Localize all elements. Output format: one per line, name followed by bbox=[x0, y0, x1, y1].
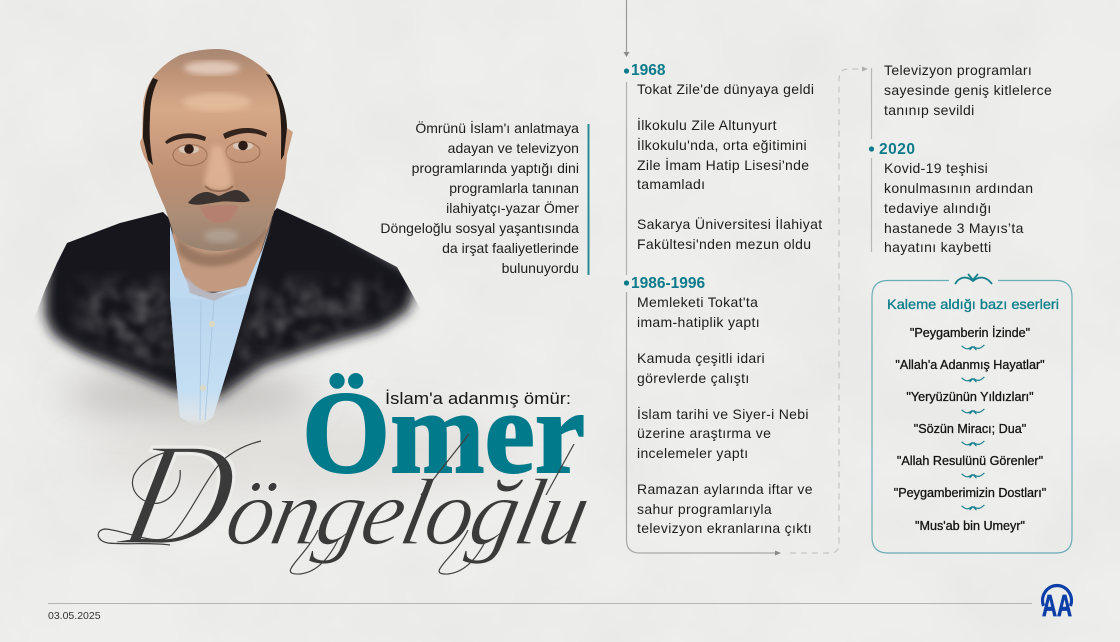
portrait: shirt bbox=[170, 220, 272, 428]
portrait: nose bbox=[205, 146, 232, 190]
icons: list ornaments bbox=[962, 345, 984, 510]
title: surname: öngeloğlu bbox=[218, 459, 597, 565]
television events: sayesinde geniş kitlelerce bbox=[884, 82, 1052, 98]
icon: ornament top bbox=[955, 274, 992, 284]
title block bbox=[98, 367, 607, 577]
1968 events: Tokat Zile'de dünyaya geldi bbox=[637, 81, 814, 97]
1968 events: İlkokulu Zile Altunyurt bbox=[637, 116, 777, 133]
1986-1996 events: İslam tarihi ve Siyer-i Nebi bbox=[637, 405, 809, 422]
intro paragraph: da irşat faaliyetlerinde bbox=[442, 240, 579, 256]
2020 events: hastanede 3 Mayıs’ta bbox=[884, 220, 1024, 236]
works list: "Peygamberin İzinde" bbox=[910, 326, 1030, 340]
intro accent line bbox=[588, 124, 590, 275]
2020 events bbox=[884, 160, 1033, 255]
1968 events: Zile İmam Hatip Lisesi'nde bbox=[637, 156, 809, 173]
1986-1996 events: sahur programlarıyla bbox=[637, 501, 772, 517]
portrait: undershirt bbox=[186, 276, 246, 301]
portrait: mouth bbox=[200, 205, 238, 223]
1986-1996 events: Memleketi Tokat'ta bbox=[637, 294, 758, 310]
works list bbox=[894, 326, 1046, 533]
title: surname flourishes bbox=[98, 434, 574, 574]
portrait photo illustration bbox=[40, 49, 420, 428]
portrait: forehead highlight bbox=[183, 93, 251, 111]
portrait: eye bags bbox=[173, 144, 207, 166]
portrait: jacket bbox=[40, 190, 420, 400]
portrait: mist below jacket bbox=[65, 371, 315, 419]
portrait: neck bbox=[172, 205, 272, 292]
1986-1996 events: imam-hatiplik yaptı bbox=[637, 314, 760, 330]
portrait: shirt buttons bbox=[200, 321, 215, 391]
1968 events: İlkokulu'nda, orta eğitimini bbox=[637, 136, 807, 153]
intro paragraph: Döngeloğlu sosyal yaşantısında bbox=[380, 220, 579, 236]
portrait: eyebrows bbox=[165, 128, 267, 144]
2020 events: hayatını kaybetti bbox=[884, 239, 992, 255]
timeline 1968 marker: 1968 bbox=[631, 62, 666, 79]
intro paragraph: ilahiyatçı-yazar Ömer bbox=[446, 199, 579, 216]
television events: tanınıp sevildi bbox=[884, 102, 975, 118]
works list: "Allah'a Adanmış Hayatlar" bbox=[895, 358, 1045, 372]
intro paragraph: programlarla tanınan bbox=[449, 180, 579, 196]
title: first name: Ömer bbox=[302, 367, 585, 498]
works list: "Sözün Miracı; Dua" bbox=[914, 422, 1026, 436]
1986-1996 events: üzerine araştırma ve bbox=[637, 425, 771, 441]
television events bbox=[884, 62, 1052, 118]
works list: "Yeryüzünün Yıldızları" bbox=[906, 390, 1034, 404]
intro paragraph: adayan ve televizyon bbox=[448, 140, 579, 156]
2020 events: konulmasının ardından bbox=[884, 180, 1033, 196]
1968 events: tamamladı bbox=[637, 176, 705, 192]
portrait: moustache bbox=[188, 190, 250, 205]
timeline left column bbox=[624, 62, 822, 536]
timeline 2020 marker: 2020 bbox=[879, 141, 915, 158]
timeline 1986-1996 marker: 1986-1996 bbox=[631, 275, 706, 292]
intro paragraph bbox=[380, 119, 579, 276]
works list: "Mus'ab bin Umeyr" bbox=[915, 519, 1025, 533]
portrait: hair sides bbox=[143, 74, 287, 165]
television events: Televizyon programları bbox=[884, 62, 1032, 78]
timeline right column bbox=[869, 62, 1052, 255]
portrait: eyes bbox=[179, 146, 199, 154]
title: surname: D bbox=[107, 413, 251, 577]
timeline connector arrow top bbox=[624, 0, 630, 57]
portrait: head bbox=[140, 49, 293, 251]
1986-1996 events: incelemeler yaptı bbox=[637, 445, 748, 461]
1986-1996 events: televizyon ekranlarına çıktı bbox=[637, 520, 812, 536]
icon: AA logo: AA bbox=[1042, 588, 1072, 623]
icon: AA logo bbox=[1042, 586, 1072, 623]
timeline connector between columns bbox=[626, 66, 868, 556]
footer rule bbox=[48, 602, 1032, 604]
1986-1996 events: görevlerde çalıştı bbox=[637, 370, 750, 386]
panel heading: Kaleme aldığı bazı eserleri bbox=[887, 296, 1059, 312]
works list: "Allah Resulünü Görenler" bbox=[897, 454, 1043, 468]
date: 03.05.2025 bbox=[48, 610, 101, 622]
portrait: shirt lower panel bbox=[170, 293, 250, 428]
title: kicker: İslam'a adanmış ömür: bbox=[385, 389, 571, 408]
1986-1996 events bbox=[637, 294, 813, 536]
portrait: placket lines bbox=[200, 300, 214, 420]
1986-1996 events: Kamuda çeşitli idari bbox=[637, 350, 765, 366]
intro paragraph: programlarında yaptığı dini bbox=[412, 160, 579, 176]
works list: "Peygamberimizin Dostları" bbox=[894, 486, 1046, 500]
portrait: chin highlight bbox=[204, 229, 238, 243]
2020 events: Kovid-19 teşhisi bbox=[884, 160, 988, 176]
1968 events bbox=[637, 81, 822, 252]
intro paragraph: bulunuyordu bbox=[502, 260, 579, 276]
intro paragraph: Ömrünü İslam'ı anlatmaya bbox=[415, 119, 579, 136]
2020 events: tedaviye alındığı bbox=[884, 200, 992, 216]
1968 events: Sakarya Üniversitesi İlahiyat bbox=[637, 215, 822, 232]
portrait: scalp shine bbox=[184, 61, 240, 75]
1986-1996 events: Ramazan aylarında iftar ve bbox=[637, 481, 813, 497]
1968 events: Fakültesi'nden mezun oldu bbox=[637, 236, 811, 252]
panel: works bbox=[872, 274, 1072, 553]
